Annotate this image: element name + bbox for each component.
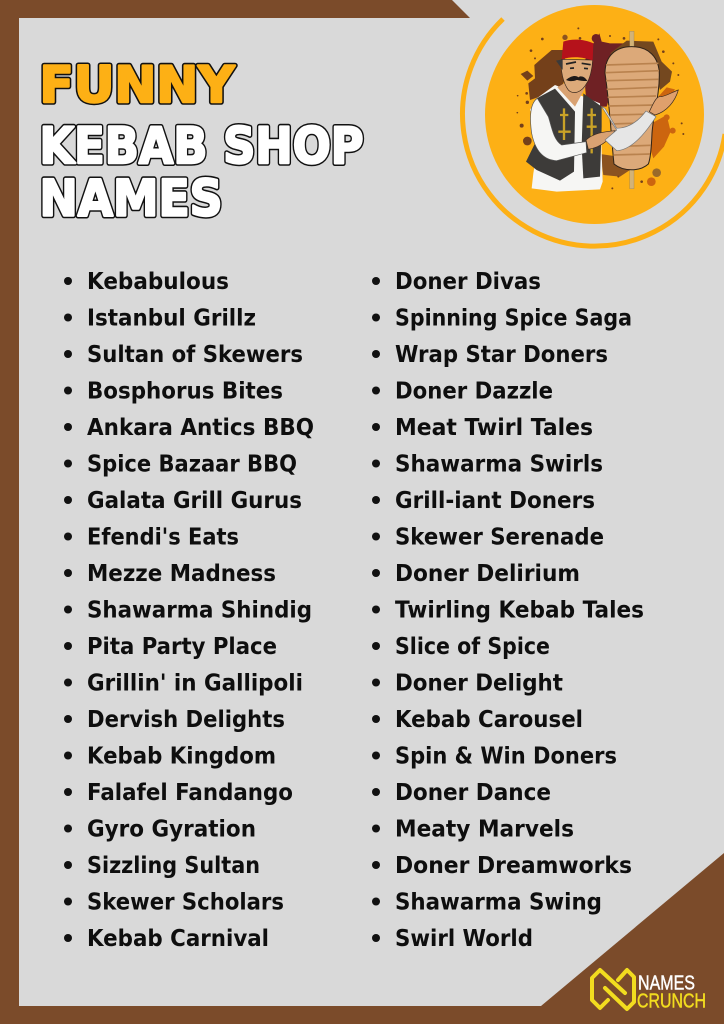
hair [556,59,563,70]
list column: left: Shawarma Shindig [87,598,312,624]
list column: left: Gyro Gyration [87,816,256,842]
list column: right: Wrap Star Doners [395,342,608,368]
list column: right: Shawarma Swirls [395,452,603,478]
paint splatter [516,27,684,189]
list column: left: Sultan of Skewers [87,342,303,368]
list column: right: Spinning Spice Saga [395,306,632,332]
right sleeve [602,107,656,151]
fez hat [562,40,593,61]
heading: kebab shop: KEBAB SHOP [40,117,364,175]
list column: right: Doner Divas [395,269,541,295]
logo text: names: NAMES [638,972,695,994]
list column: right: Grill-iant Doners [395,488,595,514]
vest embroidery [558,108,597,153]
list column: right: Meat Twirl Tales [395,415,593,441]
list column: left: Falafel Fandango [87,780,293,806]
seller body [526,40,678,192]
face [561,59,593,93]
doner skewer [630,31,634,189]
list column: left: Ankara Antics BBQ [87,415,314,441]
illustration: kebab seller with doner [516,27,684,192]
list column: right: Meaty Marvels [395,816,574,842]
icon: N mark [592,970,634,1009]
heading: names: NAMES [40,170,222,228]
list column: left: Mezze Madness [87,561,276,587]
list column: left: Galata Grill Gurus [87,488,302,514]
mustache [566,76,587,81]
vest [526,89,575,181]
list column: right: Skewer Serenade [395,524,604,550]
orange circle [485,5,704,224]
raised hand [649,90,678,115]
logo text: crunch: CRUNCH [637,990,706,1012]
white shirt [530,85,603,192]
list column: right: Twirling Kebab Tales [395,598,644,624]
heading: funny: FUNNY [40,56,235,114]
list column: left: Kebab Kingdom [87,744,276,770]
list column: right: Spin & Win Doners [395,744,617,770]
list column: left: Sizzling Sultan [87,853,260,879]
eyebrows and eyes [566,62,591,69]
list column: right [372,269,644,952]
heading: kebab shop: KEBAB SHOP [40,117,364,175]
decorative ring arc [463,19,724,246]
list column: left [64,269,314,952]
list column: right: Doner Delight [395,670,563,696]
heading: funny: FUNNY [40,56,235,114]
list column: right: Shawarma Swing [395,890,602,916]
list column: left: Kebab Carnival [87,926,269,952]
pointing hand [586,131,615,149]
list column: left: Spice Bazaar BBQ [87,452,297,478]
list column: left: Dervish Delights [87,707,285,733]
title [40,56,364,228]
list column: left: Efendi's Eats [87,524,239,550]
doner meat [605,47,659,170]
list column: left: Pita Party Place [87,634,277,660]
list column: left: Kebabulous [87,269,229,295]
list column: left: Istanbul Grillz [87,306,256,332]
neck [557,83,587,107]
list column: right: Doner Delirium [395,561,580,587]
list column: right: Doner Dance [395,780,551,806]
left sleeve [530,98,587,161]
list column: right: Slice of Spice [395,634,550,660]
list column: left: Grillin' in Gallipoli [87,670,303,696]
list column: right: Kebab Carousel [395,707,583,733]
list column: left: Bosphorus Bites [87,378,283,404]
list column: right: Swirl World [395,926,533,952]
list column: left: Skewer Scholars [87,890,284,916]
logo: Names Crunch [592,970,706,1012]
heading: names: NAMES [40,170,222,228]
list column: right: Doner Dreamworks [395,853,632,879]
list column: right: Doner Dazzle [395,378,553,404]
